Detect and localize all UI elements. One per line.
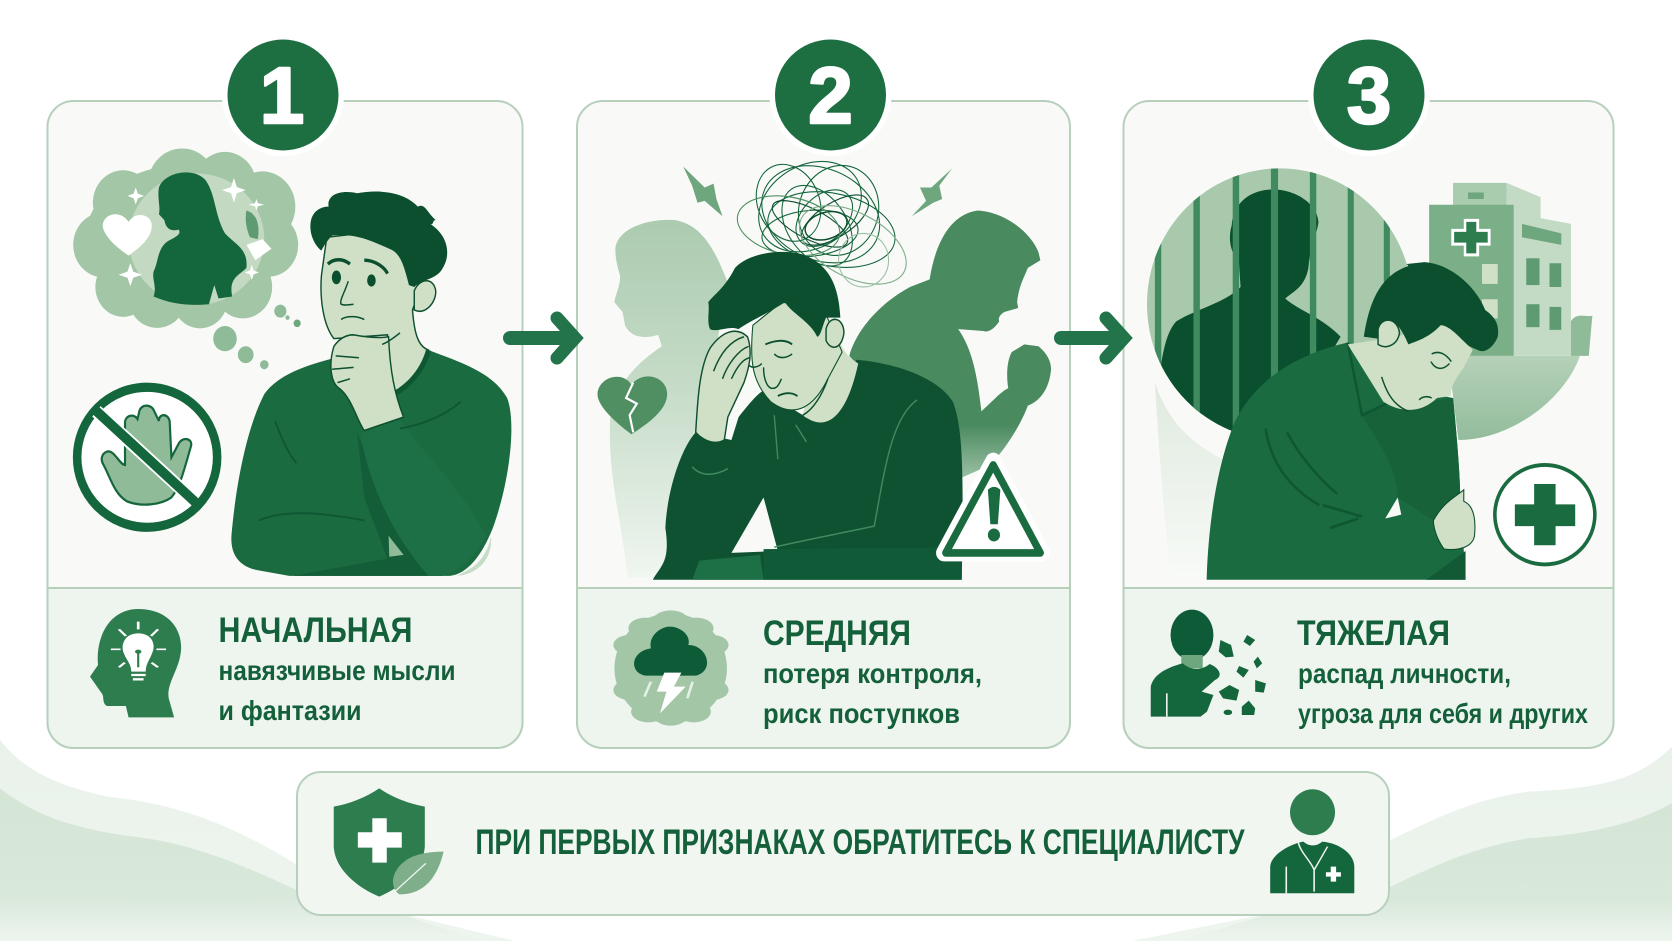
ghost: woman silhouette — [610, 220, 728, 578]
illustration: distressed man — [597, 144, 1051, 580]
icon: head with lightbulb — [90, 609, 181, 717]
man figure — [231, 192, 511, 576]
man figure — [1207, 262, 1498, 580]
icon: thought cloud — [73, 148, 301, 369]
text: stage 1 caption: НАЧАЛЬНАЯ — [218, 611, 412, 650]
badge: number 3: 3 — [1347, 51, 1391, 140]
text: stage 3 caption — [1297, 614, 1588, 729]
panel: stage 3 — [1124, 34, 1614, 748]
icon: prison bars circle — [1147, 168, 1408, 431]
text: stage 2 caption: СРЕДНЯЯ — [763, 614, 911, 653]
text: stage 3 caption: распад личности, — [1298, 658, 1511, 689]
text: stage 3 caption: ТЯЖЕЛАЯ — [1297, 614, 1450, 653]
arrow: stage 2 to 3 — [1061, 318, 1124, 358]
icons: lightning bolts — [683, 166, 952, 216]
panel: stage 1 — [48, 34, 522, 748]
badge: number 2: 2 — [808, 51, 853, 140]
text: stage 1 caption: навязчивые мысли — [218, 655, 456, 686]
text: stage 1 caption: и фантазии — [218, 695, 362, 726]
badge: number 2 — [770, 34, 892, 156]
text: stage 1 caption — [218, 611, 456, 726]
text: stage 2 caption: риск поступков — [763, 698, 960, 729]
arrow: stage 1 to 2 — [510, 318, 575, 358]
icon: broken heart — [597, 376, 667, 434]
man figure — [653, 252, 963, 580]
background waves — [0, 740, 1672, 941]
icon: medical cross badge — [1495, 465, 1595, 564]
panel: call to action — [297, 772, 1389, 915]
illustration: thinking man — [73, 148, 511, 576]
text: call to action: ПРИ ПЕРВЫХ ПРИЗНАКАХ ОБРАТИТЕСЬ К СПЕЦИАЛИСТУ — [476, 823, 1245, 862]
icon: hospital — [1429, 183, 1592, 356]
ghost: angry man silhouette — [849, 210, 1051, 478]
badge: number 1 — [222, 34, 344, 156]
illustration: man with bars and hospital — [1147, 153, 1595, 580]
panel: stage 2 — [577, 34, 1070, 748]
icon: scribble — [733, 144, 917, 300]
icon: doctor — [1270, 789, 1354, 893]
badge: number 3 — [1308, 34, 1430, 156]
icon: shield with cross and leaf — [334, 788, 444, 897]
icon: prohibited hand — [77, 387, 217, 527]
icon: warning triangle — [944, 461, 1042, 553]
text: stage 2 caption — [763, 614, 982, 729]
ground — [1451, 356, 1580, 440]
text: stage 3 caption: угроза для себя и других — [1298, 698, 1588, 729]
text: stage 2 caption: потеря контроля, — [763, 658, 982, 689]
icon: storm cloud — [613, 610, 729, 726]
icon: disintegrating person — [1151, 610, 1266, 717]
badge: number 1: 1 — [260, 51, 304, 140]
